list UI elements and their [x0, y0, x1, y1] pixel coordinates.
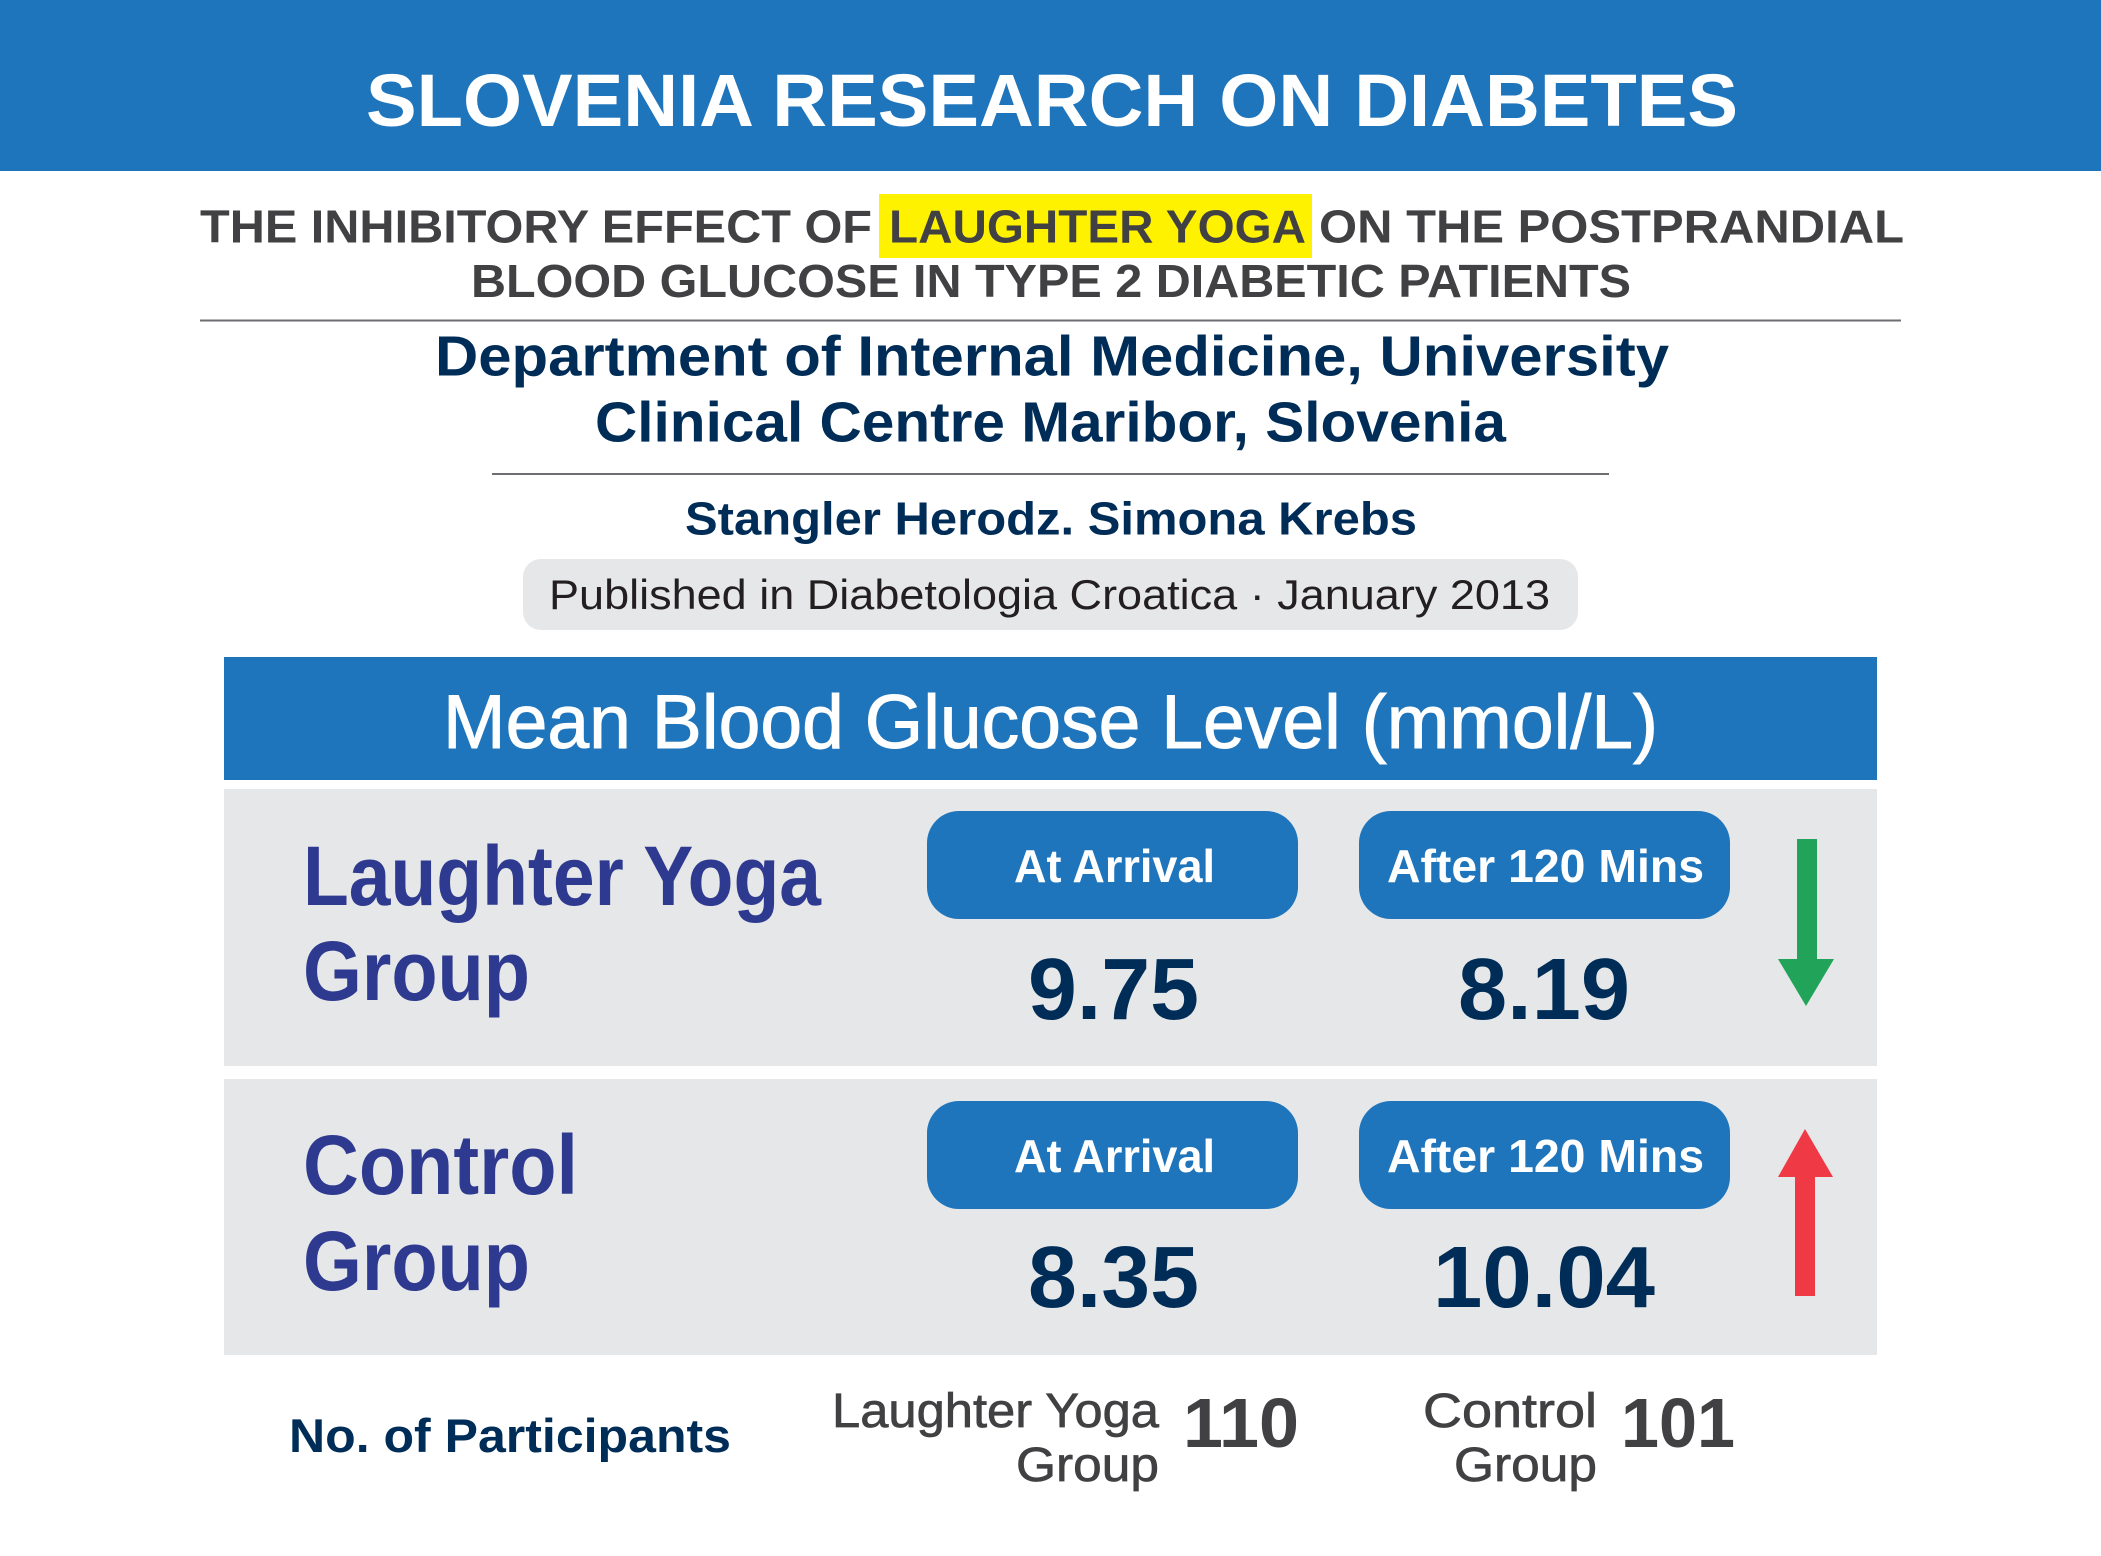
participants label: No. of Participants	[289, 1409, 731, 1462]
value after 120 mins: 10.04	[1433, 1229, 1655, 1326]
study title: THE INHIBITORY EFFECT OF	[200, 200, 872, 252]
group label	[303, 1118, 578, 1308]
control count: Control	[1423, 1385, 1597, 1438]
laughter yoga count	[832, 1384, 1299, 1492]
laughter yoga count: Group	[1016, 1439, 1159, 1492]
group label: Group	[303, 1214, 530, 1308]
value after 120 mins: 8.19	[1458, 941, 1630, 1038]
publication pill	[523, 559, 1578, 630]
study title: ON THE POSTPRANDIAL	[1319, 200, 1904, 252]
value at arrival: 8.35	[1028, 1229, 1199, 1326]
study title: BLOOD GLUCOSE IN TYPE 2 DIABETIC PATIENTS	[471, 255, 1631, 307]
after 120 mins badge: After 120 Mins	[1387, 840, 1704, 892]
after 120 mins badge: After 120 Mins	[1387, 1130, 1704, 1182]
group label	[303, 829, 822, 1018]
department	[435, 324, 1669, 455]
arrow: down	[1778, 839, 1834, 1006]
panel: laughter yoga group	[224, 789, 1877, 1066]
publication pill: Published in Diabetologia Croatica · January 2013	[549, 571, 1550, 618]
value at arrival: 9.75	[1028, 941, 1199, 1038]
author: Stangler Herodz. Simona Krebs	[685, 492, 1417, 544]
panel: control group	[224, 1079, 1877, 1355]
after 120 mins badge	[1359, 1101, 1730, 1209]
at arrival badge: At Arrival	[1014, 840, 1215, 892]
laughter yoga count: 110	[1183, 1384, 1299, 1462]
title: SLOVENIA RESEARCH ON DIABETES	[366, 59, 1738, 142]
table heading	[224, 657, 1877, 780]
arrow: up	[1778, 1129, 1833, 1296]
laughter yoga count: Laughter Yoga	[832, 1385, 1159, 1438]
control count: 101	[1621, 1384, 1735, 1462]
after 120 mins badge	[1359, 811, 1730, 919]
study title	[200, 194, 1904, 307]
participants row	[289, 1384, 1735, 1492]
at arrival badge	[927, 811, 1298, 919]
group label: Laughter Yoga	[303, 829, 822, 923]
department: Clinical Centre Maribor, Slovenia	[595, 391, 1507, 455]
control count	[1423, 1384, 1735, 1492]
at arrival badge: At Arrival	[1014, 1130, 1215, 1182]
at arrival badge	[927, 1101, 1298, 1209]
control count: Group	[1454, 1439, 1597, 1492]
department: Department of Internal Medicine, University	[435, 324, 1669, 388]
group label: Group	[303, 924, 530, 1018]
table heading: Mean Blood Glucose Level (mmol/L)	[443, 680, 1658, 765]
header banner	[0, 0, 2101, 171]
highlight: laughter yoga	[879, 194, 1312, 258]
study title: LAUGHTER YOGA	[889, 200, 1306, 252]
group label: Control	[303, 1118, 578, 1212]
